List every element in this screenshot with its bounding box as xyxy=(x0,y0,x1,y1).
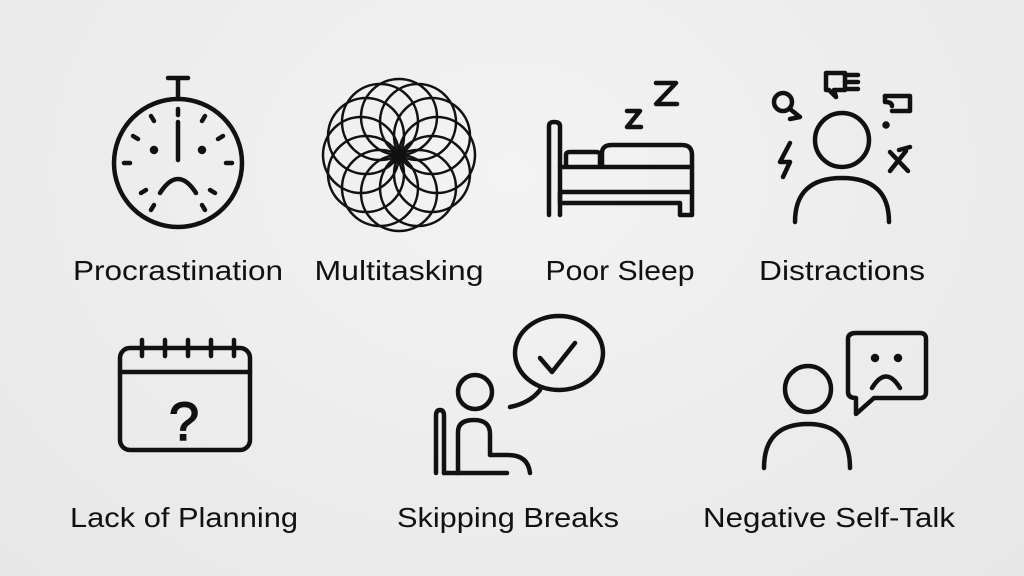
label: Distractions: Distractions xyxy=(759,255,925,286)
label: Multitasking: Multitasking xyxy=(314,255,484,286)
label: Skipping Breaks: Skipping Breaks xyxy=(397,502,619,533)
label: Negative Self-Talk: Negative Self-Talk xyxy=(703,502,956,533)
icon: flower circles xyxy=(323,79,475,231)
icon: bed xyxy=(549,83,692,215)
label: Procrastination: Procrastination xyxy=(73,255,283,286)
icon: person with check bubble xyxy=(436,316,603,473)
text: question mark: ? xyxy=(169,392,199,452)
label: Poor Sleep: Poor Sleep xyxy=(546,255,694,286)
icon: clock xyxy=(114,78,242,227)
icon: calendar xyxy=(120,340,250,450)
icon: person with sad bubble xyxy=(764,333,926,468)
icon: distracted person xyxy=(774,73,910,222)
label: Lack of Planning: Lack of Planning xyxy=(70,502,298,533)
